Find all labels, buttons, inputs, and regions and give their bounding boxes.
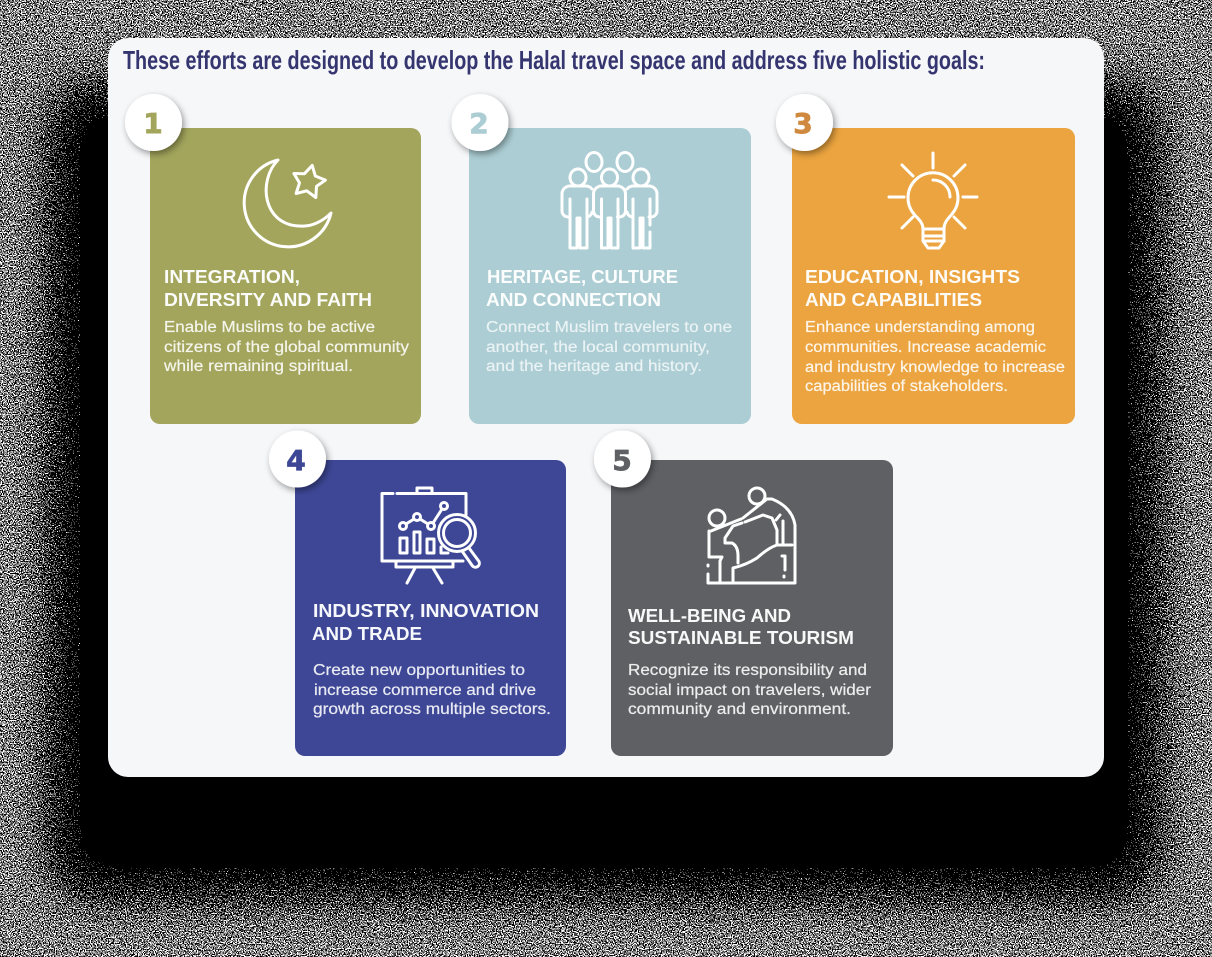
text: goal 5 description: social impact on travelers, wider bbox=[628, 682, 871, 699]
text: goal 5 description: community and environment. bbox=[628, 701, 851, 718]
heading: goal 5: WELL-BEING AND bbox=[628, 606, 791, 626]
heading: goal 4: AND TRADE bbox=[312, 624, 422, 644]
text: goal 3 description: capabilities of stakeholders. bbox=[805, 378, 1008, 395]
icon: presentation board with magnifier bbox=[382, 488, 479, 583]
text: goal 5 description bbox=[628, 662, 871, 718]
badge: number 1: 1 bbox=[143, 107, 163, 140]
heading: goal 2: AND CONNECTION bbox=[486, 290, 661, 310]
icon: light bulb bbox=[889, 153, 977, 248]
badge: number 3: 3 bbox=[793, 107, 813, 140]
icon: climbers helping each other bbox=[708, 488, 795, 583]
badge: number 5: 5 bbox=[612, 444, 632, 477]
text: goal 4 description bbox=[313, 662, 551, 718]
text: goal 2 description: and the heritage and history. bbox=[486, 358, 702, 375]
badge: number 5 bbox=[594, 430, 651, 488]
text: goal 3 description: communities. Increase academic bbox=[805, 339, 1046, 356]
heading: goal 1: DIVERSITY AND FAITH bbox=[164, 290, 372, 310]
heading: goal 1 bbox=[164, 267, 372, 310]
text: goal 1 description: while remaining spiritual. bbox=[163, 358, 353, 375]
heading: goal 2 bbox=[486, 267, 678, 310]
text: goal 2 description: Connect Muslim travelers to one bbox=[486, 319, 732, 336]
text: goal 2 description bbox=[486, 319, 732, 375]
heading: goal 4: INDUSTRY, INNOVATION bbox=[313, 601, 539, 621]
text: goal 5 description: Recognize its responsibility and bbox=[628, 662, 867, 679]
text: goal 4 description: increase commerce and drive bbox=[314, 682, 536, 699]
text: goal 2 description: another, the local community, bbox=[486, 339, 710, 356]
heading: goal 4 bbox=[312, 601, 539, 644]
icon: group of people bbox=[562, 152, 657, 248]
panel: goal 3 bbox=[792, 128, 1075, 424]
text: goal 1 description bbox=[163, 319, 409, 375]
heading: goal 3 bbox=[805, 267, 1020, 310]
icon: crescent moon and star bbox=[244, 160, 331, 247]
badge: number 3 bbox=[776, 94, 833, 151]
badge: number 2: 2 bbox=[469, 107, 489, 140]
badge: number 4 bbox=[269, 430, 326, 488]
panel: goal 4 bbox=[295, 460, 566, 756]
text: goal 1 description: Enable Muslims to be active bbox=[164, 319, 375, 336]
text: goal 1 description: citizens of the global community bbox=[164, 339, 409, 356]
text: goal 4 description: growth across multiple sectors. bbox=[313, 701, 551, 718]
badge: number 4: 4 bbox=[286, 444, 306, 477]
panel: goal 5 bbox=[611, 460, 893, 756]
text: goal 3 description: and industry knowledge to increase bbox=[805, 359, 1065, 376]
heading: goal 5: SUSTAINABLE TOURISM bbox=[628, 628, 854, 648]
panel: goal 2 bbox=[469, 128, 751, 424]
badge: number 1 bbox=[125, 94, 182, 151]
heading: goal 2: HERITAGE, CULTURE bbox=[487, 267, 678, 287]
panel: main card bbox=[108, 38, 1104, 777]
heading: goal 1: INTEGRATION, bbox=[164, 267, 300, 287]
text: goal 4 description: Create new opportunities to bbox=[313, 662, 525, 679]
badge: number 2 bbox=[452, 94, 508, 151]
text: goal 3 description: Enhance understanding among bbox=[805, 319, 1035, 336]
heading: goal 5 bbox=[628, 606, 854, 648]
panel: goal 1 bbox=[150, 128, 421, 424]
text: goal 3 description bbox=[805, 319, 1065, 395]
heading: goal 3: AND CAPABILITIES bbox=[805, 290, 982, 310]
heading: goal 3: EDUCATION, INSIGHTS bbox=[805, 267, 1020, 287]
